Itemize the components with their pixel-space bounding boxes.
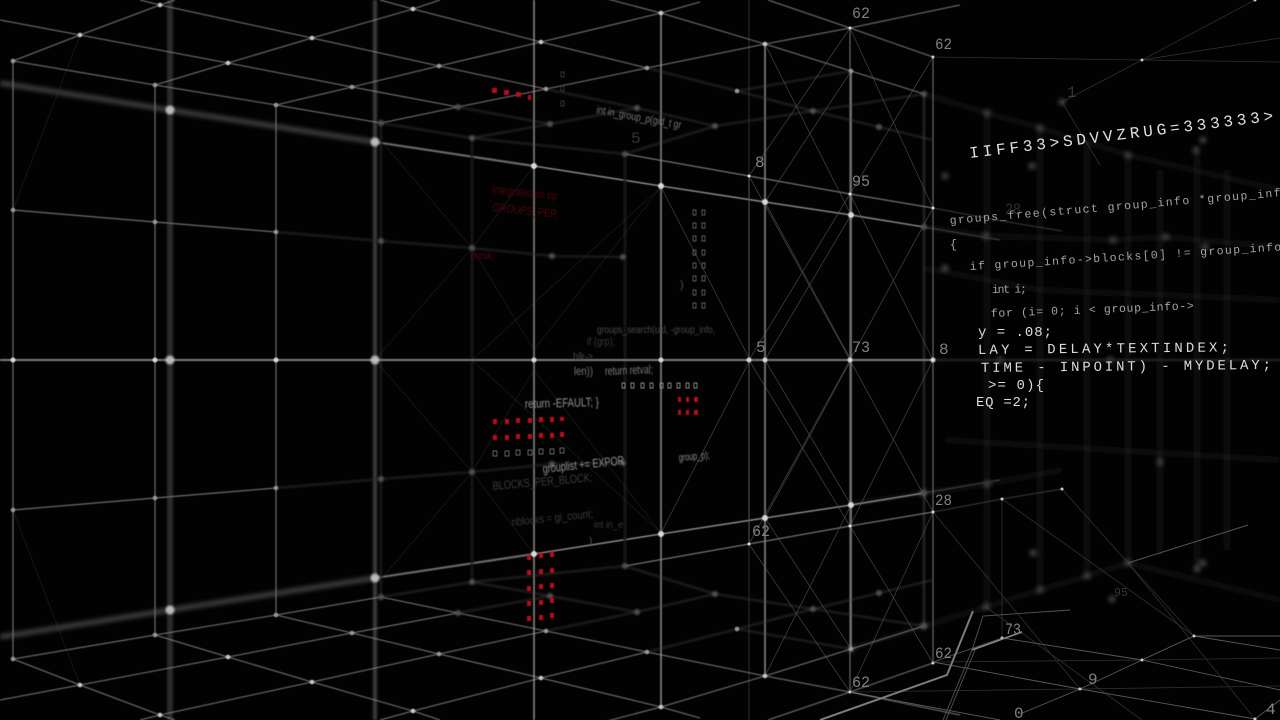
- center code fragments: len)): [574, 364, 593, 378]
- center code fragments: nblocks = gi_count;: [511, 508, 594, 529]
- far blurred network on the right: [851, 94, 1280, 649]
- center code fragments: return -EFAULT; }: [525, 395, 599, 411]
- red code text: GROUPS_PER: [492, 202, 558, 221]
- number labels: 62: [852, 674, 870, 692]
- number labels: 95: [1114, 586, 1128, 600]
- center code fragments: group_p);: [678, 449, 710, 464]
- number labels: 1: [1067, 84, 1077, 102]
- small code lines: for (i= 0; i < group_info->: [991, 300, 1194, 321]
- center code fragments: blk->: [573, 351, 593, 363]
- number labels: 28: [1005, 201, 1021, 219]
- center code fragments: int in_e: [594, 519, 623, 531]
- number labels: 8: [755, 154, 765, 172]
- number labels: 95: [852, 173, 870, 191]
- right floor mesh: [850, 0, 1280, 720]
- center code fragments: BLOCKS_PER_BLOCK;: [492, 470, 593, 493]
- number labels: 62: [752, 523, 770, 541]
- red code text: Integrated on op: [492, 184, 558, 203]
- center code fragments: return retval;: [605, 362, 653, 378]
- center code fragments: if (grp);: [587, 336, 615, 348]
- number labels: 9: [1088, 671, 1098, 689]
- center code fragments: groups_search(uid, -group_info,: [597, 324, 715, 336]
- center code fragments: int in_group_p(gid_t gr: [595, 104, 682, 132]
- number labels: 4: [1266, 701, 1276, 719]
- red dot matrices: [492, 88, 698, 621]
- small code lines: int i;: [992, 283, 1027, 297]
- number labels: 73: [852, 339, 870, 357]
- display code lines: y = .08;: [978, 325, 1052, 341]
- red code text: [471, 184, 558, 262]
- number labels: 8: [939, 341, 949, 359]
- number labels: [631, 5, 1276, 720]
- red code text: break;: [471, 250, 494, 262]
- HUD bracket lines bottom right: [820, 610, 1070, 720]
- center code fragments: ): [680, 279, 684, 291]
- number labels: 5: [631, 130, 641, 148]
- number labels: 28: [935, 492, 952, 510]
- number labels: 73: [1005, 621, 1021, 639]
- center code fragments: grouplist += EXPOR: [542, 453, 625, 476]
- right code block: [949, 108, 1280, 411]
- display code lines: [976, 325, 1271, 411]
- small code lines: if group_info->blocks[0] != group_info: [969, 241, 1280, 274]
- display code lines: LAY = DELAY*TEXTINDEX;: [978, 340, 1229, 359]
- heading code line: IIFF33>SDVVZRUG=333333>: [968, 108, 1274, 163]
- number labels: 62: [852, 5, 870, 23]
- number labels: 62: [935, 36, 952, 54]
- center code fragments: [492, 104, 715, 547]
- number labels: 62: [935, 645, 952, 663]
- display code lines: >= 0){: [988, 378, 1044, 394]
- center code fragments: ): [589, 536, 592, 547]
- small code lines: {: [950, 239, 957, 252]
- small code lines: [949, 187, 1280, 321]
- number labels: 5: [756, 339, 766, 357]
- display code lines: TIME - INPOINT) - MYDELAY;: [981, 358, 1271, 377]
- display code lines: EQ =2;: [976, 395, 1030, 411]
- small code lines: groups_free(struct group_info *group_inf: [949, 187, 1280, 228]
- hollow square matrices: [493, 72, 705, 456]
